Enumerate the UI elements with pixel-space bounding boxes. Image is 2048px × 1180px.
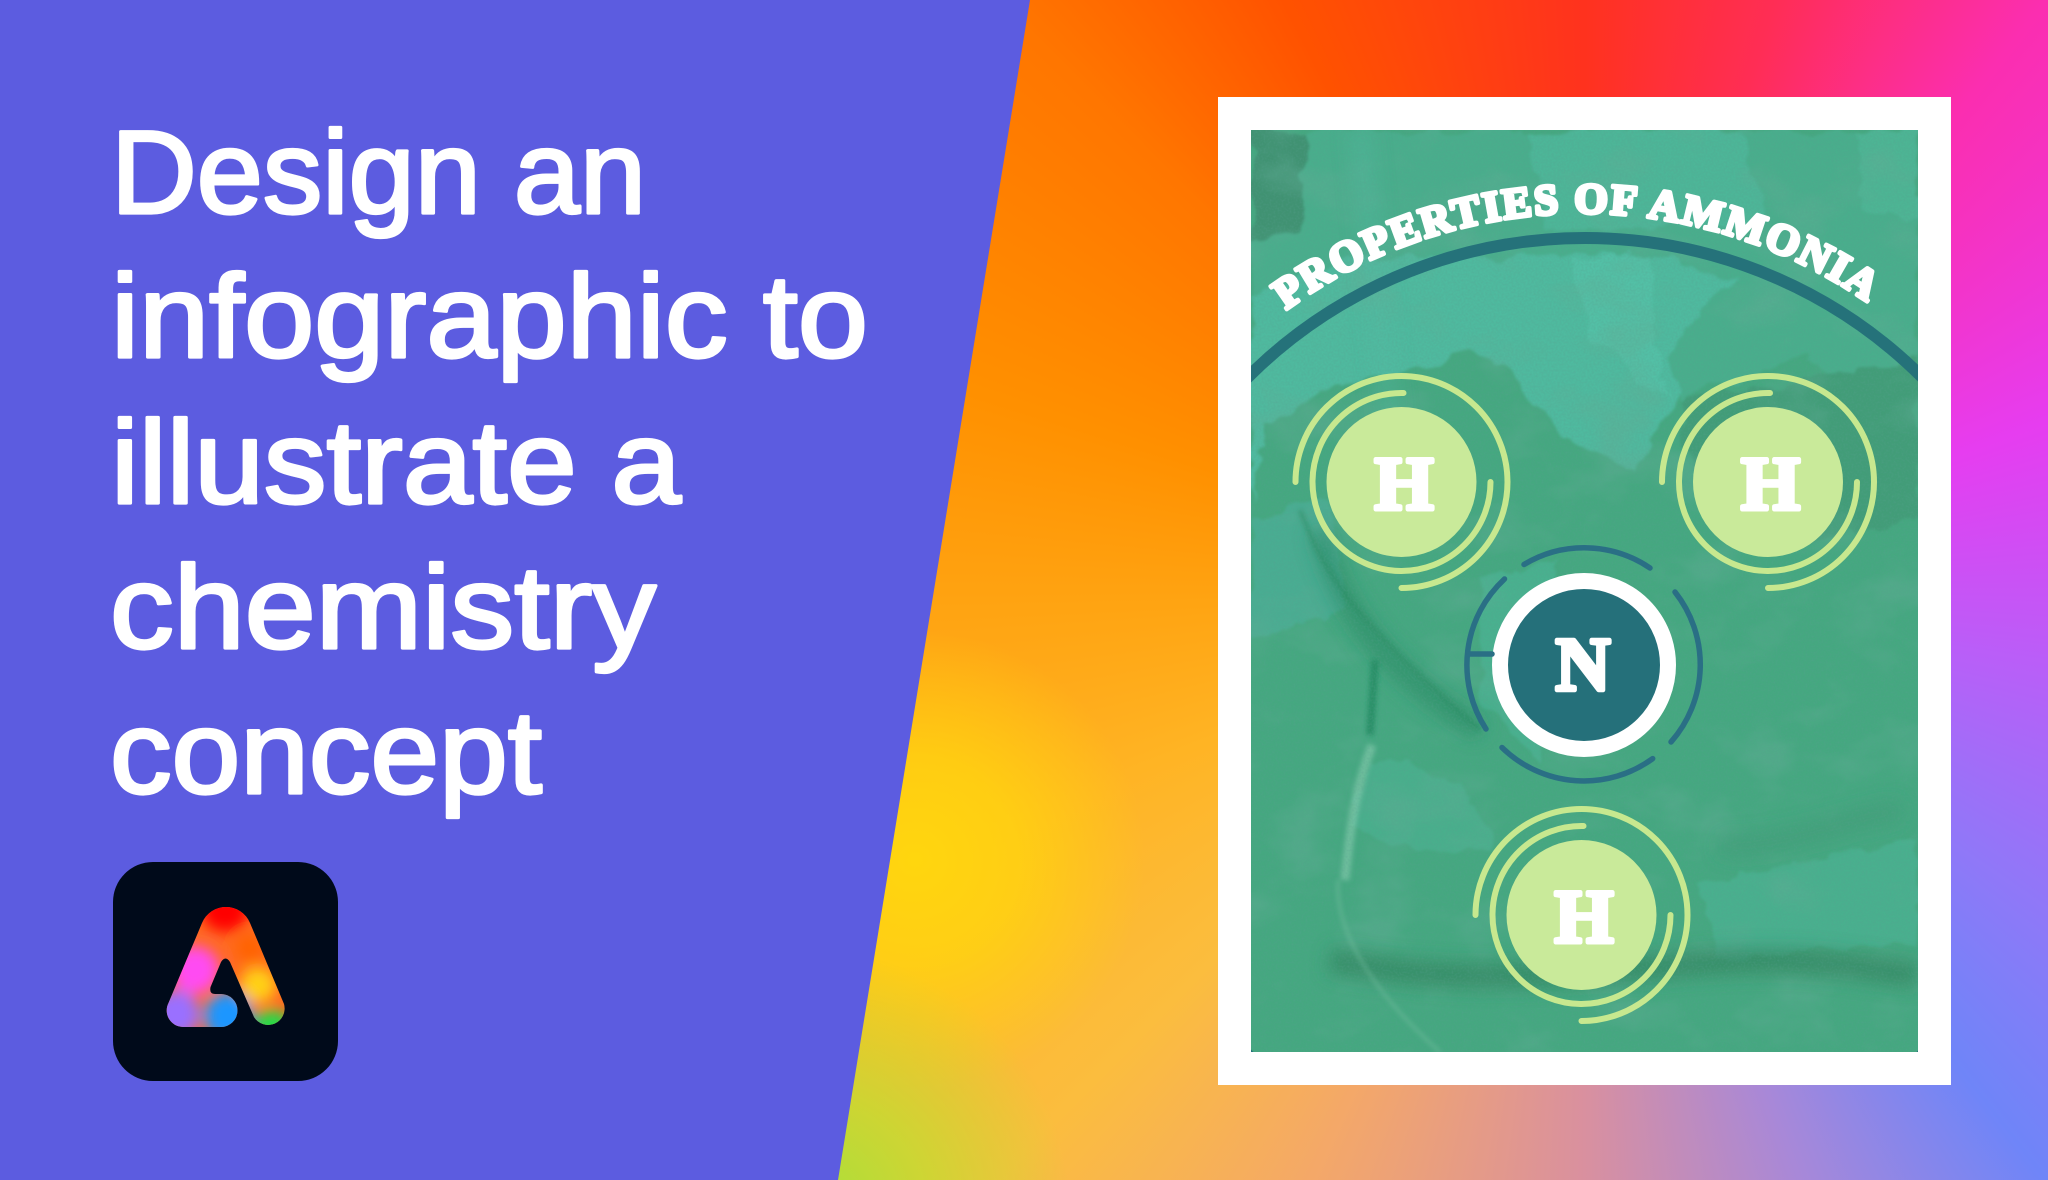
panel: green paper texture xyxy=(1251,130,1918,1052)
hydrogen atom: top right xyxy=(1662,376,1874,588)
hydrogen atom: top left xyxy=(1296,376,1508,588)
panel: white poster frame xyxy=(1218,97,1951,1085)
icon: Adobe Express logo xyxy=(113,862,338,1081)
poster heading: PROPERTIES OF AMMONIA xyxy=(1268,182,1874,312)
hydrogen atom: bottom xyxy=(1476,809,1688,1021)
nitrogen atom: center: N xyxy=(1556,623,1610,707)
title: chemistry xyxy=(110,542,656,674)
title: infographic to xyxy=(111,251,868,383)
title xyxy=(110,107,868,819)
nitrogen atom: center xyxy=(1467,548,1700,781)
hydrogen atom: top left: H xyxy=(1374,442,1434,526)
arc under title xyxy=(1251,232,1918,1052)
title: illustrate a xyxy=(111,397,681,529)
panel: purple title panel xyxy=(0,0,1030,1180)
hydrogen atom: top right: H xyxy=(1741,442,1800,526)
main artwork xyxy=(113,97,1951,1085)
title: Design an xyxy=(111,107,646,239)
title: concept xyxy=(110,687,542,819)
hydrogen atom: bottom: H xyxy=(1554,875,1614,959)
